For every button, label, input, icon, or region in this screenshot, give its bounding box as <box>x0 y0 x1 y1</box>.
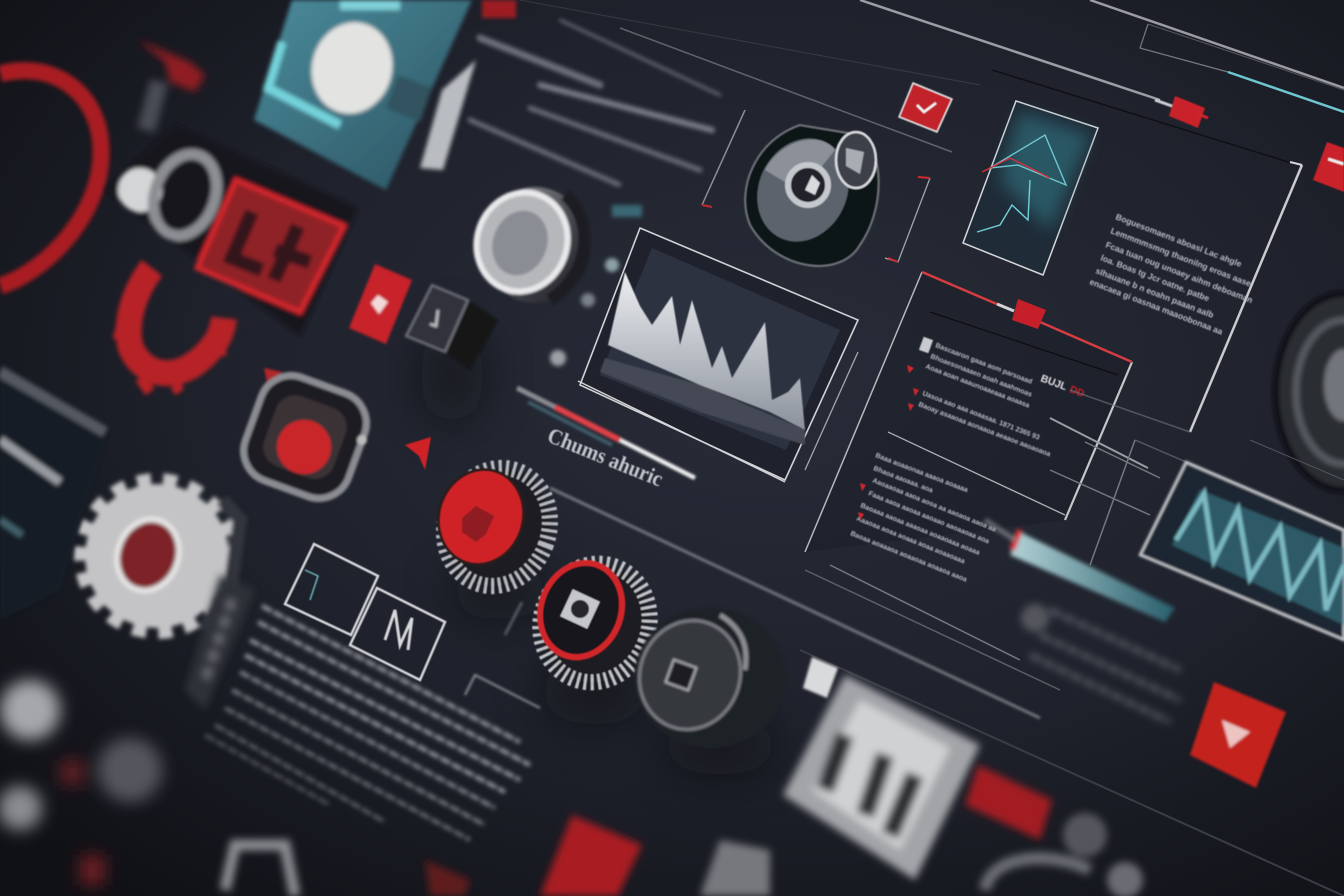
connector: red clip top <box>1155 96 1208 128</box>
text block: top right <box>1088 212 1254 337</box>
text block: document lower: Baoaa aoaaaoa aoaaoaa aoaaoa aaoa <box>849 530 968 584</box>
icon: large grey blurred card <box>783 675 980 880</box>
text block: document lower: Aaoaaoaa aaoa aooa aa aaoaoa aaoa aa <box>871 477 997 534</box>
icon: red gear <box>118 268 226 392</box>
text block: document lower: Faaa aaoa aaoaa aaoaao aaoaaoaa aoa <box>867 490 990 545</box>
text block: top right: Fcaa tuan oug unoaey aihm deboaman <box>1104 240 1254 305</box>
text block: document upper: Uasoa aao aaa aoaasaa. 1871 2365 93 <box>921 390 1041 442</box>
small arrows <box>465 602 540 708</box>
red top marker <box>482 0 516 18</box>
text block: document upper <box>907 337 1087 458</box>
text block: document upper: BUJL <box>1039 373 1069 393</box>
teal image card <box>963 101 1098 275</box>
icon: central disc <box>741 123 879 266</box>
panel: top text lines <box>470 20 720 185</box>
icons: blurred lower left <box>0 680 162 885</box>
chart caption: Chums ahuric <box>544 422 667 491</box>
icon: line frames <box>285 544 445 680</box>
connector: red rule and clip <box>922 272 1132 362</box>
icon: red ring knob <box>524 548 666 698</box>
text block: lower left <box>205 606 530 840</box>
text block: top right: Lemmmmsmng thaonilng eroas aase <box>1109 226 1253 289</box>
panel: teal zigzag card <box>1140 462 1344 640</box>
top right small rule <box>1148 24 1344 480</box>
top rule lines <box>520 0 980 152</box>
left vertical device <box>185 575 255 710</box>
icon: red arrow <box>405 437 431 470</box>
icon: red square button <box>349 264 412 344</box>
icon: rounded red knob <box>235 367 375 507</box>
blurred strip <box>420 60 476 170</box>
icon: blurred red bar <box>965 765 1052 840</box>
icon: red ring top-left <box>0 71 101 286</box>
icon: red gear knob <box>426 453 566 601</box>
text block: document upper: Aoaa aoan aaaunoaaeaaa aoaasa <box>924 363 1030 410</box>
panel: area chart <box>580 228 858 480</box>
icon: small white square <box>803 657 838 698</box>
text block: document lower: Bhaoa aaoaaa. aoa <box>872 465 934 494</box>
chart: mountain series <box>600 272 805 445</box>
icon: rings <box>118 145 228 245</box>
text block: document upper: Bascaaron gaaa aom parsoaad <box>934 342 1033 386</box>
text block: document upper: DD <box>1068 384 1087 400</box>
text block: top right: loa. Boas tg Jcr oatne. patbe <box>1099 253 1211 303</box>
chart lines in card <box>977 135 1066 232</box>
icon: small red marker <box>264 368 282 395</box>
text block: document lower: Aaaoaa aoaa aoaaa aoaa aoaaoaaa <box>855 515 966 565</box>
icon: blurred bottom ring <box>225 815 770 896</box>
panel: teal image card <box>254 0 472 190</box>
text block: document upper: Baoay asaaoaa aonaaoa aeaaoe aaoaoaoa <box>917 401 1051 458</box>
text block: top right: enacaea gi oasnaa maaoobonaa aa <box>1088 277 1224 337</box>
long rule <box>550 488 1344 896</box>
icon: dark key button <box>406 285 498 370</box>
text block: top right: Boguesomaens aboasl Lac ahgle <box>1114 212 1243 269</box>
panel: document <box>805 272 1132 584</box>
icon: blurred lower-right shapes <box>985 813 1143 896</box>
icon: small red pin <box>137 40 205 132</box>
panel: teal left card <box>0 362 108 620</box>
icon: right speaker disc <box>1276 294 1344 490</box>
shadows under raised controls <box>420 325 780 775</box>
teal rule top right <box>1140 24 1344 112</box>
text block: top right: slhauane b n eoahn paaan aalb <box>1094 266 1215 320</box>
text block: document lower: Baaa aoaaonaa aaaoa aoaaaa <box>874 452 969 494</box>
panel: red block icon card <box>105 125 358 336</box>
icon: red check badge <box>899 83 952 132</box>
icon: red square at right edge <box>1313 142 1344 192</box>
stylus <box>985 520 1175 622</box>
panel: right frame <box>992 70 1302 432</box>
icon: chrome ring knob <box>463 180 590 304</box>
chart baseline <box>578 352 858 482</box>
text block: document upper: Bhoaesonaaaen aoah aaahmoas <box>929 353 1033 399</box>
icon: red play button <box>1190 682 1286 788</box>
frame around disc <box>702 110 930 262</box>
text block: lower right <box>1021 604 1180 722</box>
icon: white gear <box>81 480 240 632</box>
text block: document lower: Baoaaa aaoaa aaaoaa aoaaoaaa aoaaa <box>859 502 981 557</box>
icon: red block <box>197 180 344 312</box>
icon: dark knob <box>624 606 786 748</box>
connector lines <box>805 390 1344 690</box>
side column dots <box>550 205 642 366</box>
progress bar <box>517 388 695 478</box>
text block: document lower <box>849 452 997 584</box>
